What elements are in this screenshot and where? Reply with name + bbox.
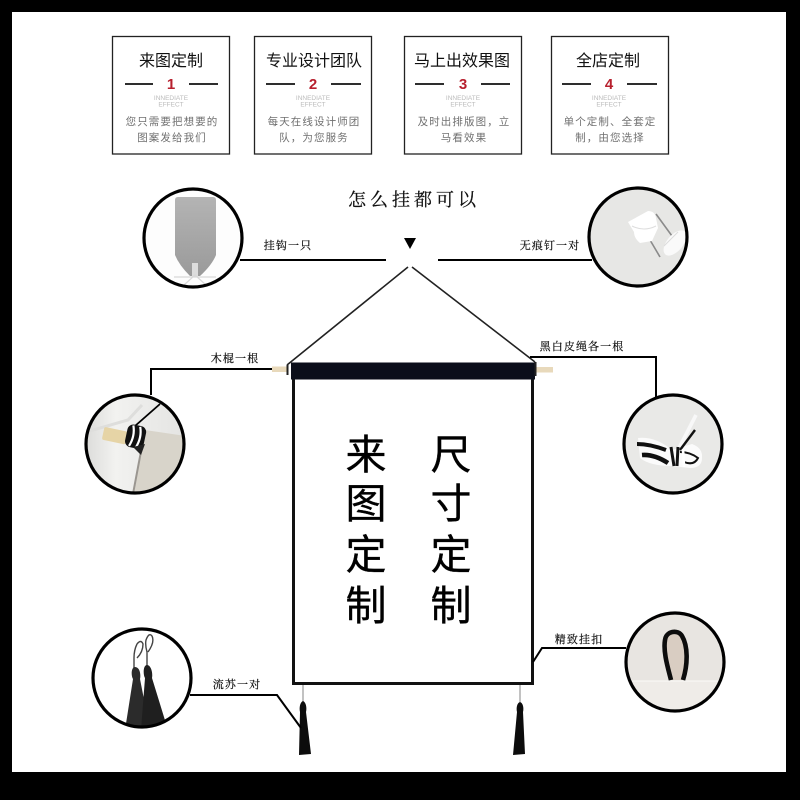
banner text left column: 制 xyxy=(346,583,386,629)
card 4 description: 单个定制、全套定 xyxy=(564,115,656,128)
card 4 heading: 全店定制 xyxy=(576,52,640,70)
hanging rope xyxy=(287,267,535,365)
card 1 description: 您只需要把想要的 xyxy=(126,115,218,128)
leader: 流苏一对 xyxy=(190,677,301,728)
card 1 description: 图案发给我们 xyxy=(137,131,207,144)
banner text left column: 定 xyxy=(346,532,386,578)
circle: loop button xyxy=(626,613,724,713)
card 3: 马上出效果图 xyxy=(404,36,522,154)
card 4 english caption: EFFECT xyxy=(596,102,622,108)
leader: 流苏一对: 流苏一对 xyxy=(213,677,261,691)
card 4 description: 制，由您选择 xyxy=(575,131,645,144)
card 1 heading: 来图定制 xyxy=(139,52,203,70)
wooden dowel xyxy=(272,366,553,372)
banner top bar xyxy=(291,362,535,380)
banner text left column: 图 xyxy=(346,481,386,527)
circle: wooden stick detail xyxy=(86,395,186,500)
card 2 description: 队，为您服务 xyxy=(279,131,349,144)
card 4: 全店定制 xyxy=(552,36,668,154)
card 3 heading: 马上出效果图 xyxy=(414,52,510,70)
rope rings xyxy=(288,362,536,376)
card 2 description: 每天在线设计师团 xyxy=(268,115,360,128)
section heading: 怎么挂都可以 xyxy=(348,190,480,210)
card 2 number: 2 xyxy=(309,76,317,93)
card 1: 来图定制 xyxy=(112,36,230,154)
card 1 number: 1 xyxy=(167,76,175,93)
card 3 number: 3 xyxy=(459,76,467,93)
card 3 english caption: EFFECT xyxy=(450,102,476,108)
circle: traceless nails xyxy=(589,188,691,286)
leader: 挂钩一只: 挂钩一只 xyxy=(264,238,312,252)
banner text left column: 来 xyxy=(346,432,386,478)
card 2 english caption: INNEDIATE xyxy=(296,95,331,102)
banner text right column: 寸 xyxy=(430,481,472,527)
banner text right column: 尺 xyxy=(430,432,472,478)
card 2: 专业设计团队 xyxy=(254,36,372,154)
leader: 无痕钉一对: 无痕钉一对 xyxy=(520,238,580,252)
left tassel xyxy=(299,685,311,755)
leader: 黑白皮绳各一根 xyxy=(530,339,656,397)
banner text right column: 制 xyxy=(430,583,472,629)
circle: hook xyxy=(144,189,242,287)
icon: down arrow xyxy=(404,238,416,249)
right tassel xyxy=(513,685,525,755)
card 1 english caption: EFFECT xyxy=(158,102,184,108)
card 3 description: 马看效果 xyxy=(441,131,487,144)
card 4 english caption: INNEDIATE xyxy=(592,95,627,102)
leader: 黑白皮绳各一根: 黑白皮绳各一根 xyxy=(540,339,624,353)
leader: 木棍一根: 木棍一根 xyxy=(211,351,259,365)
card 3 english caption: INNEDIATE xyxy=(446,95,481,102)
card 2 heading: 专业设计团队 xyxy=(266,52,362,70)
circle: black and white leather cords xyxy=(624,395,722,493)
card 3 description: 及时出排版图，立 xyxy=(418,115,510,128)
card 4 number: 4 xyxy=(605,76,614,93)
banner text right column: 定 xyxy=(430,532,472,578)
leader: 木棍一根 xyxy=(151,351,272,395)
card 2 english caption: EFFECT xyxy=(300,102,326,108)
card 1 english caption: INNEDIATE xyxy=(154,95,189,102)
leader: 精致挂扣: 精致挂扣 xyxy=(555,632,603,646)
circle: tassels xyxy=(93,629,191,730)
hanging banner xyxy=(288,362,536,684)
leader: 精致挂扣 xyxy=(533,632,626,662)
